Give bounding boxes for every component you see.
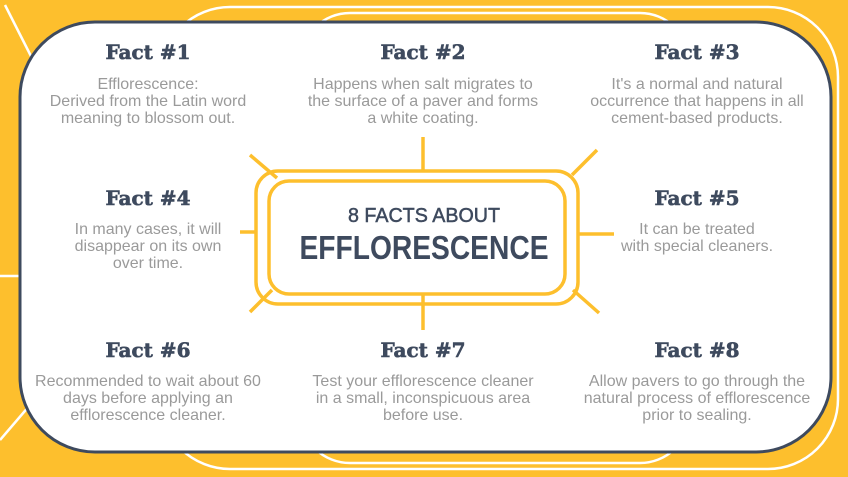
fact 2 (308, 40, 538, 127)
center title box: 8 FACTS ABOUT (348, 205, 500, 227)
fact 6: efflorescence cleaner. (70, 407, 226, 424)
fact 3: Fact #3 (654, 40, 740, 64)
fact 8: prior to sealing. (642, 407, 752, 424)
fact 6: Fact #6 (105, 338, 191, 362)
fact 6: Recommended to wait about 60 (35, 373, 261, 390)
fact 7: Fact #7 (380, 338, 466, 362)
fact 6 (35, 338, 261, 424)
fact 2: Happens when salt migrates to (313, 76, 533, 93)
fact 1: Derived from the Latin word (50, 93, 246, 110)
fact 3: It's a normal and natural (611, 76, 783, 93)
fact 2: a white coating. (367, 110, 479, 127)
fact 5: It can be treated (639, 221, 755, 238)
fact 3: cement-based products. (611, 110, 783, 127)
fact 1: meaning to blossom out. (61, 110, 235, 127)
fact 4: over time. (113, 255, 183, 272)
fact 4: Fact #4 (105, 186, 191, 210)
fact 3 (590, 40, 804, 127)
fact 7 (312, 338, 534, 424)
fact 8: Fact #8 (654, 338, 740, 362)
fact 1 (50, 40, 246, 127)
fact 8 (584, 338, 810, 424)
fact 7: before use. (383, 407, 463, 424)
fact 3: occurrence that happens in all (590, 93, 804, 110)
fact 8: natural process of efflorescence (584, 390, 810, 407)
fact 5: with special cleaners. (620, 238, 773, 255)
fact 7: Test your efflorescence cleaner (312, 373, 534, 390)
center title box: EFFLORESCENCE (300, 229, 548, 266)
fact 8: Allow pavers to go through the (589, 373, 805, 390)
fact 5 (620, 186, 773, 255)
center title box (240, 137, 614, 330)
fact 4: In many cases, it will (75, 221, 221, 238)
fact 4: disappear on its own (75, 238, 221, 255)
fact 6: days before applying an (63, 390, 233, 407)
fact 1: Efflorescence: (97, 76, 199, 93)
fact 2: Fact #2 (380, 40, 466, 64)
fact 2: the surface of a paver and forms (308, 93, 538, 110)
fact 1: Fact #1 (105, 40, 191, 64)
fact 5: Fact #5 (654, 186, 740, 210)
fact 4 (75, 186, 221, 272)
fact 7: in a small, inconspicuous area (316, 390, 530, 407)
